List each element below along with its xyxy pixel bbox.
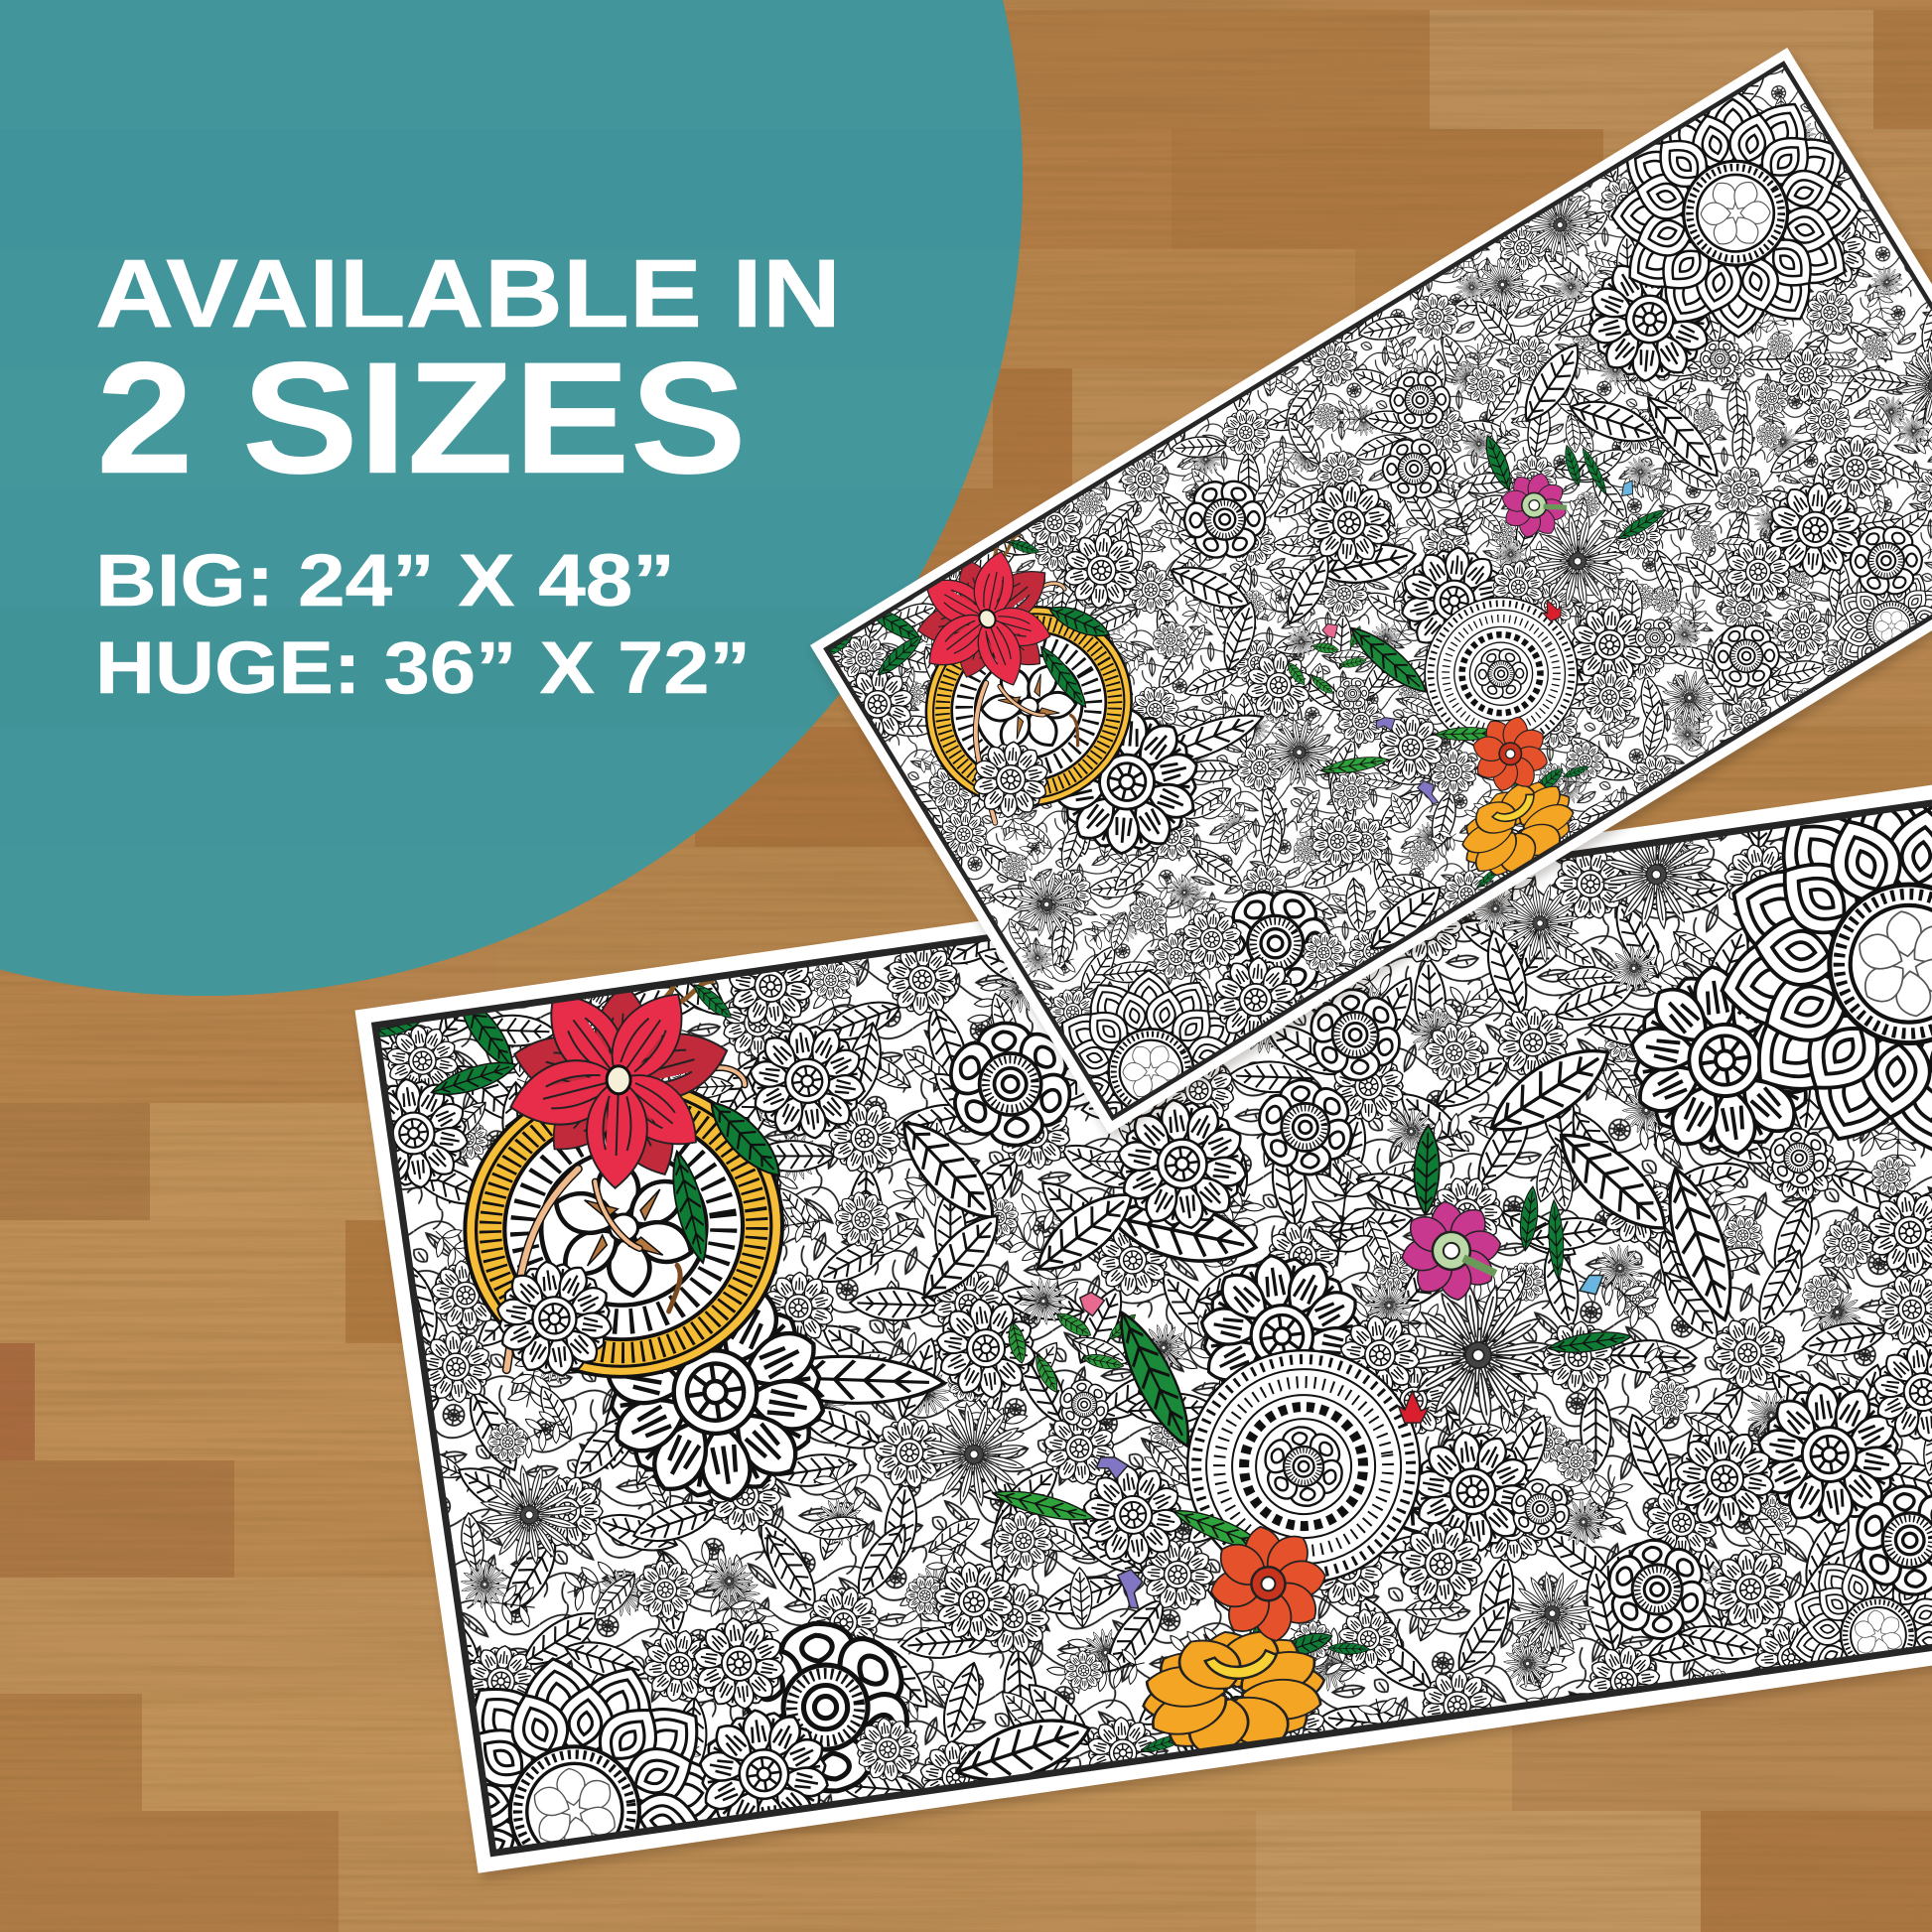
filler clusters xyxy=(249,633,1932,1932)
daisy over gold ring xyxy=(483,1248,625,1389)
orange flower group xyxy=(1093,1514,1385,1790)
purple buds xyxy=(1095,1453,1149,1611)
poster shadow: big xyxy=(359,770,1932,1879)
pink flower with sprigs xyxy=(1289,1099,1633,1389)
small poster xyxy=(719,0,1932,1240)
size line: huge: HUGE: 36” X 72” xyxy=(95,626,751,709)
large mandala right xyxy=(1696,751,1932,1177)
long green leaves xyxy=(988,1447,1272,1594)
poster line art xyxy=(249,633,1932,1932)
tan curls xyxy=(455,969,780,1370)
heading: 2 sizes: 2 SIZES xyxy=(96,329,747,506)
heading: available in: AVAILABLE IN xyxy=(95,239,841,347)
size line: big: BIG: 24” X 48” xyxy=(95,539,675,621)
large green leaf xyxy=(1106,1305,1203,1454)
green leaves around red flower xyxy=(358,948,802,1307)
poster shadow: small xyxy=(813,53,1932,1139)
outline flowers xyxy=(336,756,1932,1888)
pink bud xyxy=(1079,1291,1106,1317)
half mandala bottom right xyxy=(1777,1534,1932,1736)
center mandala xyxy=(1173,1335,1435,1597)
half mandala bottom left xyxy=(400,1637,749,1932)
black border xyxy=(375,784,1932,1853)
filler leaves xyxy=(718,996,1799,1817)
red poinsettia flower xyxy=(503,976,736,1189)
small green leaves xyxy=(1004,1298,1148,1400)
big poster xyxy=(355,784,1932,1873)
red bud xyxy=(1397,1389,1431,1426)
teal circle panel xyxy=(0,0,1033,1003)
gold ring mandala xyxy=(446,1057,802,1398)
